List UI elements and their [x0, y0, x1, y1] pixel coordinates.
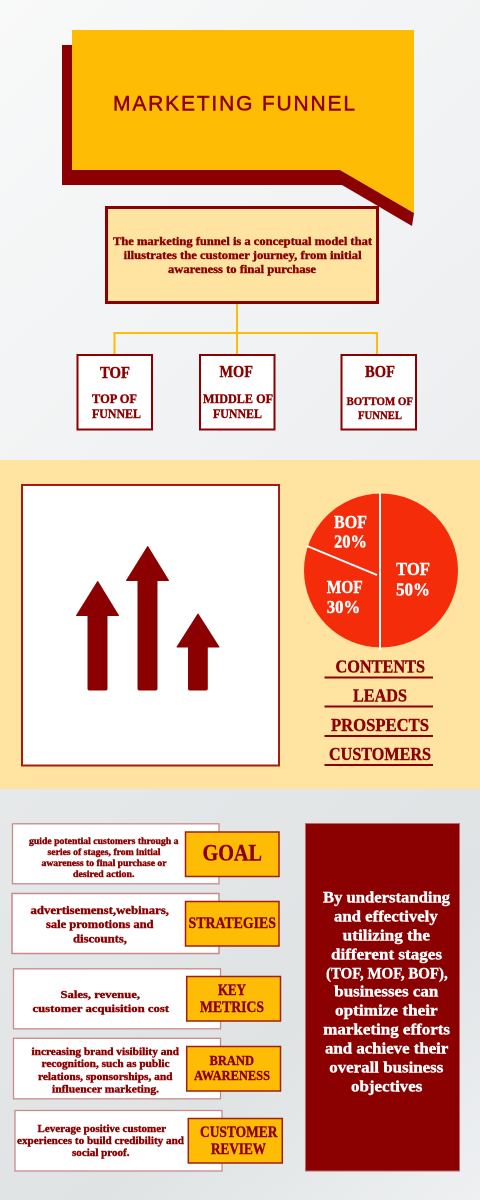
row: strategies: STRATEGIES [188, 915, 276, 932]
panel: summary: objectives [351, 1078, 422, 1095]
pie chart: MOF [327, 577, 363, 597]
pie chart: 50% [396, 580, 430, 600]
row: customer review: REVIEW [211, 1141, 266, 1158]
definition box: awareness to final purchase [168, 264, 316, 276]
row: customer review [15, 1110, 282, 1171]
box: MOF [200, 355, 274, 430]
funnel content list: PROSPECTS [331, 715, 429, 735]
panel: summary: and achieve their [325, 1040, 448, 1057]
funnel content list [324, 657, 433, 766]
funnel content list: CONTENTS [336, 657, 425, 677]
row: key metrics: customer acquisition cost [32, 1003, 169, 1015]
panel: summary: optimize their [335, 1003, 438, 1020]
funnel content list: LEADS [353, 686, 407, 706]
box: TOF: FUNNEL [92, 406, 141, 421]
definition box: illustrates the customer journey, from initial [124, 250, 362, 262]
row: customer review: experiences to build credibility and [17, 1136, 184, 1147]
pie chart: BOF [334, 512, 367, 532]
pie chart: 30% [327, 597, 360, 617]
box: BOF: BOF [365, 362, 395, 381]
panel: summary: By understanding [323, 890, 450, 907]
panel: summary: marketing efforts [323, 1021, 450, 1038]
panel: summary: businesses can [334, 984, 439, 1001]
row: strategies [12, 894, 279, 954]
box: BOF: FUNNEL [358, 408, 402, 422]
row: brand awareness: relations, sponsorships, and [38, 1072, 173, 1083]
row: goal: series of stages, from initial [48, 847, 161, 857]
panel: summary [306, 824, 460, 1171]
box: TOF: TOF [100, 363, 130, 382]
definition box [106, 208, 378, 302]
title: MARKETING FUNNEL [113, 92, 355, 116]
row: customer review: CUSTOMER [200, 1124, 278, 1141]
panel: summary: (TOF, MOF, BOF), [326, 965, 448, 982]
panel: summary: overall business [329, 1059, 443, 1076]
connector lines [114, 304, 377, 354]
row: goal: GOAL [202, 841, 262, 866]
icon: rising arrows [22, 485, 279, 766]
row: strategies: advertisemenst,webinars, [30, 905, 169, 917]
box: TOF: TOP OF [92, 391, 137, 406]
row: customer review: Leverage positive customer [38, 1124, 167, 1135]
row: goal: desired action. [73, 869, 134, 879]
row: brand awareness: influencer marketing. [52, 1085, 160, 1096]
panel: summary: and effectively [334, 909, 438, 926]
row: key metrics: KEY [218, 982, 246, 999]
row: goal: guide potential customers through a [29, 836, 179, 846]
box: BOF: BOTTOM OF [346, 394, 413, 408]
box: BOF [342, 355, 416, 430]
panel: summary: utilizing the [343, 928, 430, 945]
row: customer review: social proof. [72, 1148, 130, 1159]
row: strategies: sale promotions and [46, 919, 154, 931]
row: goal: awareness to final purchase or [42, 858, 166, 868]
row: goal [12, 824, 279, 884]
box: TOF [78, 355, 152, 430]
row: key metrics: Sales, revenue, [60, 989, 140, 1001]
row: strategies: discounts, [73, 934, 127, 946]
box: MOF: MOF [220, 362, 253, 381]
title banner [62, 30, 414, 226]
row: key metrics [14, 969, 280, 1029]
panel: summary: different stages [331, 947, 442, 964]
row: brand awareness: recognition, such as public [42, 1059, 170, 1070]
row: brand awareness: BRAND [210, 1054, 254, 1069]
pie chart: TOF [396, 559, 430, 579]
row: brand awareness [14, 1038, 280, 1099]
funnel content list: CUSTOMERS [329, 744, 431, 764]
row: brand awareness: increasing brand visibility and [32, 1047, 179, 1058]
panel: funnel stages [0, 460, 480, 789]
box: MOF: MIDDLE OF [203, 391, 273, 406]
definition box: The marketing funnel is a conceptual model that [113, 236, 372, 248]
pie chart: 20% [334, 532, 367, 552]
row: key metrics: METRICS [200, 999, 264, 1016]
box: MOF: FUNNEL [213, 406, 262, 421]
row: brand awareness: AWARENESS [194, 1069, 270, 1084]
pie chart [304, 493, 458, 650]
